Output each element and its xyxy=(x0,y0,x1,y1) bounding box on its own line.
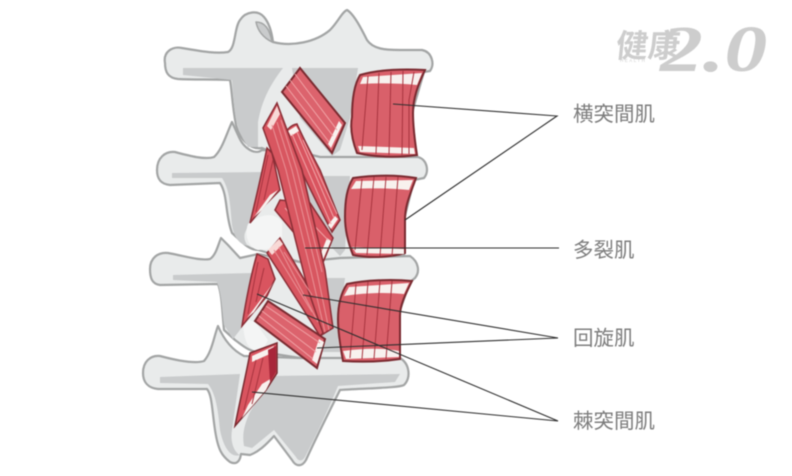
leader: transverse muscles xyxy=(393,104,557,220)
rotator muscle: lower xyxy=(255,301,325,368)
interspinous muscle: lower xyxy=(235,343,277,426)
interspinous muscle: middle xyxy=(242,254,275,326)
transverse muscle: lower block xyxy=(338,280,412,362)
interspinous muscle: upper xyxy=(250,148,280,223)
multifidus: long strand xyxy=(263,103,333,336)
rotator muscle: middle xyxy=(275,200,333,265)
vertebra 3 xyxy=(150,238,418,360)
vertebra 2 xyxy=(157,122,427,262)
logo: 健康: 健康 xyxy=(614,28,682,64)
labels xyxy=(573,103,655,433)
vertebra 1 xyxy=(165,10,432,165)
label: 多裂肌: 多裂肌 xyxy=(573,239,634,262)
vertebra 4 xyxy=(143,326,409,465)
rotator muscle: upper xyxy=(282,68,345,153)
leader: multifidus xyxy=(305,247,559,249)
label: 回旋肌: 回旋肌 xyxy=(573,327,634,350)
multifidus: second strand xyxy=(285,124,340,232)
label: 横突間肌: 横突間肌 xyxy=(573,103,655,126)
transverse muscle: upper block xyxy=(351,70,425,157)
logo: tagline: HEALTH xyxy=(620,58,646,63)
logo: 2.0: 2.0 xyxy=(659,12,767,86)
leader lines xyxy=(252,104,559,421)
label: 棘突間肌: 棘突間肌 xyxy=(573,410,655,433)
transverse muscle: middle block xyxy=(345,176,416,257)
logo xyxy=(614,12,767,86)
spine bones xyxy=(143,10,432,465)
leader: rotators xyxy=(303,295,558,348)
multifidus: lower strand xyxy=(267,238,323,336)
leader: interspinous muscles xyxy=(252,294,558,421)
